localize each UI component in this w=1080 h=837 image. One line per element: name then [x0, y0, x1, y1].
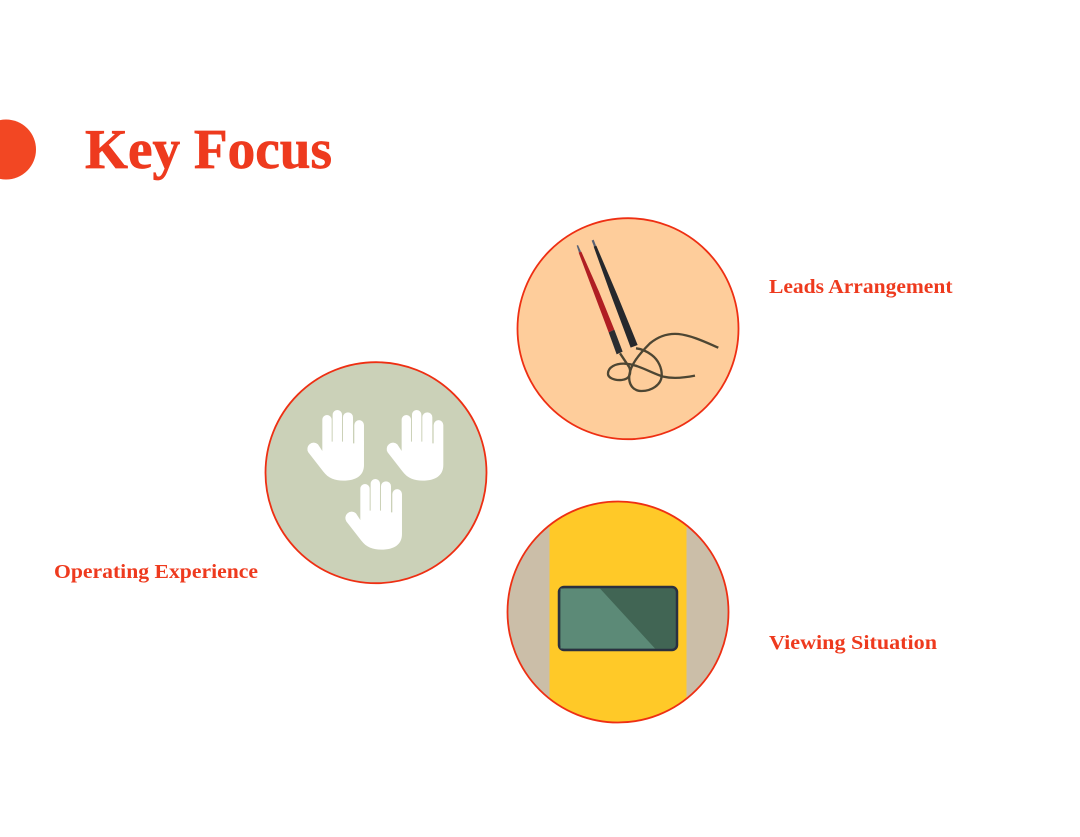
icon: three hands: [307, 410, 443, 550]
label: leads arrangement: Leads Arrangement: [769, 276, 953, 298]
title: Key Focus: [85, 119, 332, 181]
panel: leads arrangement: [518, 218, 738, 439]
panel: viewing situation: [506, 500, 730, 724]
circle outline: viewing: [508, 502, 728, 722]
label: viewing situation: Viewing Situation: [769, 632, 937, 654]
icon: test leads: [577, 240, 718, 391]
circle background: leads: [518, 218, 738, 439]
label: operating experience: Operating Experience: [54, 561, 258, 583]
panel: operating experience: [266, 362, 486, 583]
icon: screen: [559, 587, 677, 650]
decorative title dot: [0, 120, 36, 180]
circle background: operating: [266, 362, 486, 583]
circle background: viewing: [506, 500, 730, 724]
